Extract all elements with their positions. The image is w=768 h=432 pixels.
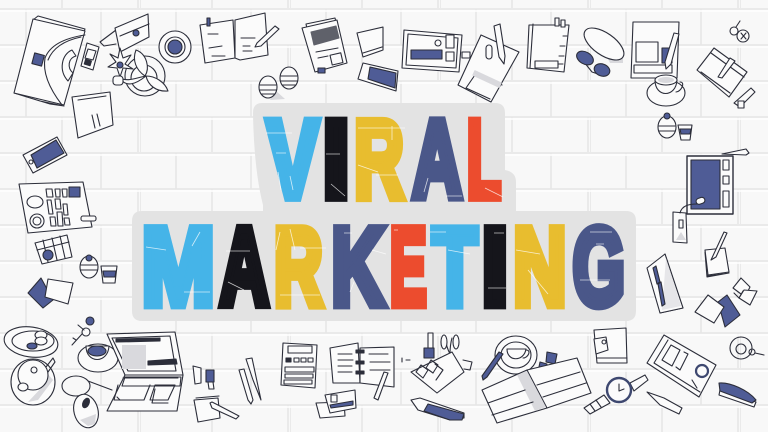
heading line: VIRAL [267, 97, 501, 221]
icon: small phone [81, 43, 99, 70]
icon: smartphone top [358, 63, 398, 91]
icon: wristwatch [584, 375, 648, 414]
icon: clips [730, 21, 749, 42]
icon: calendar [35, 235, 72, 264]
icon: paper sheet with pen [631, 22, 679, 78]
icon: stacked papers with ring [647, 335, 716, 397]
icon: business cards [316, 390, 356, 418]
icon: laptop [107, 332, 183, 411]
icon: open notebook with pen [200, 13, 279, 63]
icon: small frame [357, 27, 383, 57]
heading line: MARKETING: N [513, 205, 566, 328]
heading line: VIRAL: A [412, 99, 462, 221]
icon: coffee cup with saucer [159, 31, 191, 63]
heading line: VIRAL: I [323, 97, 350, 220]
icon: plate with cookies [2, 323, 60, 361]
icon: blue and white papers [28, 278, 73, 308]
heading line: VIRAL: R [354, 99, 404, 221]
icon: stapler [719, 383, 756, 407]
heading line: VIRAL: L [467, 99, 501, 221]
icon: ring notebook [527, 18, 569, 72]
heading line: MARKETING: M [142, 206, 215, 329]
icon: book left [72, 92, 113, 138]
heading line: MARKETING: K [332, 206, 384, 328]
icon: control board [19, 182, 96, 233]
icon: cup, plate and spoon [482, 336, 537, 380]
icon: calculator [281, 343, 317, 388]
icon: cards [695, 278, 757, 327]
icon: planner with pen [697, 48, 747, 97]
heading line: MARKETING [142, 205, 625, 329]
title: Viral Marketing [132, 97, 636, 329]
icon: sunglasses [574, 48, 612, 78]
icon: notes with pen [705, 232, 729, 277]
icon: clipboard and pencil [458, 24, 519, 102]
icon: teapot [11, 358, 55, 405]
heading line: MARKETING: G [573, 207, 625, 329]
icon: glasses case [579, 22, 629, 66]
icon: smartphone left [23, 137, 67, 173]
icon: tent card [647, 254, 683, 313]
grey halo behind title [132, 103, 636, 321]
icon: pencil [647, 392, 682, 414]
paint cracks on letters [146, 126, 612, 295]
icon: flower and plant pot [108, 48, 168, 96]
heading line: MARKETING: T [432, 206, 477, 328]
icon: ring and key [730, 337, 764, 359]
icon: folder bag [14, 16, 85, 106]
icon: marker [734, 88, 755, 108]
icon: wallet [594, 328, 627, 363]
icon: utility knife [411, 398, 464, 420]
icon: bottle and cup right [658, 113, 692, 140]
icon: open planner [330, 343, 394, 400]
heading line: MARKETING: R [274, 207, 323, 328]
icon: usb drives [193, 366, 214, 389]
icon: newspaper [302, 18, 347, 73]
icon: large open planner [482, 352, 591, 423]
heading line: MARKETING: A [220, 206, 269, 328]
icon: bottles [259, 67, 298, 100]
icon: pen on tablet [722, 149, 749, 155]
icon: coffee cup bottom left [78, 344, 118, 372]
heading line: MARKETING: I [482, 205, 508, 328]
icon: desk organizer [402, 333, 472, 393]
icon: pens [239, 358, 261, 404]
icon: briefcase [100, 14, 149, 52]
icon: notes and pen bottom [194, 396, 239, 422]
heading line: VIRAL: V [267, 99, 318, 221]
icon: mouse with cable [62, 376, 112, 431]
icon: cup with saucer right [647, 75, 685, 106]
icon: bottle and cup left [80, 255, 117, 283]
icon: tablet with blue screen [687, 156, 733, 214]
icon: clip tool with wire [673, 196, 706, 243]
icon: keys [72, 317, 94, 345]
heading line: MARKETING: E [390, 206, 427, 328]
icon: tablet device [402, 30, 470, 72]
